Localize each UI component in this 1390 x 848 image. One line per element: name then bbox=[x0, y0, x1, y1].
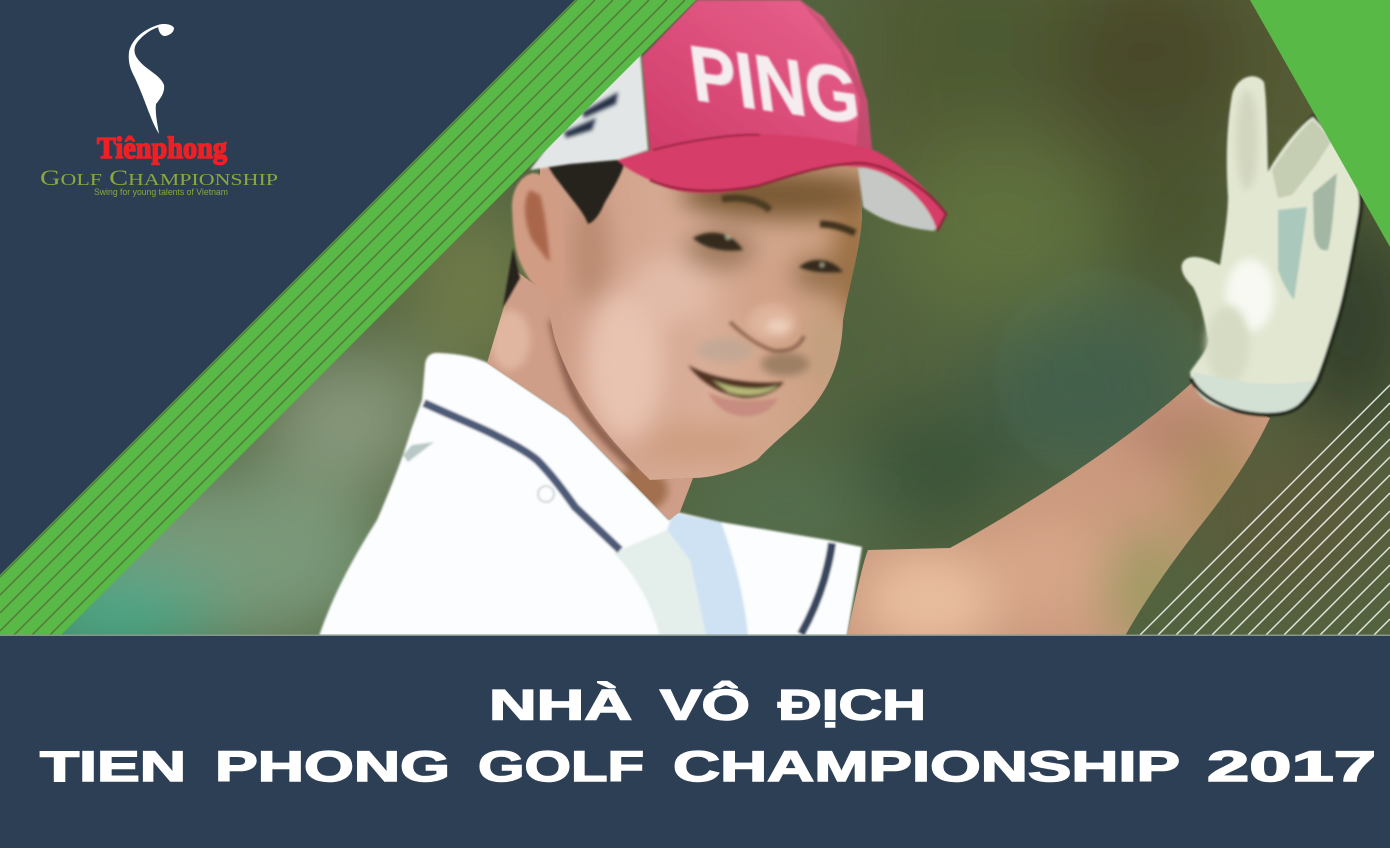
shirt emblem bbox=[538, 486, 554, 502]
head bbox=[503, 150, 880, 490]
glove highlight bbox=[1226, 259, 1274, 331]
logo tagline: Swing for young talents of Vietnam bbox=[94, 187, 228, 198]
collar trim bbox=[424, 403, 620, 550]
logo: Tien Phong Golf Championship bbox=[40, 24, 278, 198]
glove dark edge bbox=[1268, 114, 1363, 412]
top right green triangle bbox=[1250, 0, 1390, 247]
sleeve trim bbox=[801, 543, 832, 634]
logo subtitle: G OLF C HAMPIONSHIP bbox=[40, 165, 278, 190]
nose bbox=[730, 322, 804, 351]
cap underbrim bbox=[858, 165, 945, 231]
heading line 2: CHAMPIONSHIP bbox=[673, 743, 1180, 791]
heading line 2: PHONG bbox=[215, 743, 450, 791]
heading line 2: GOLF bbox=[478, 743, 644, 791]
golf glove bbox=[1182, 76, 1363, 415]
face bbox=[540, 164, 862, 480]
ear bbox=[510, 172, 552, 294]
heading line 1: VÔ bbox=[660, 680, 750, 730]
bottom title panel bbox=[0, 634, 1390, 848]
heading line 1 bbox=[489, 680, 926, 730]
white polo shirt bbox=[319, 353, 862, 636]
shoulder shade bbox=[403, 442, 434, 462]
pink cap bbox=[530, 0, 946, 231]
eyes bbox=[693, 233, 743, 251]
bokeh highlight bbox=[995, 270, 1205, 480]
eyebrows bbox=[722, 198, 770, 210]
cap sponsor text bbox=[564, 92, 618, 138]
sleeve blue shade bbox=[667, 513, 748, 636]
cap mesh panel bbox=[530, 50, 648, 170]
heading line 1: ĐỊCH bbox=[778, 682, 926, 730]
heading line 2 bbox=[40, 743, 1376, 791]
photo background foliage bbox=[0, 0, 1390, 670]
logo wordmark: Tiênphong bbox=[97, 130, 227, 165]
hair bbox=[545, 158, 626, 224]
neck bbox=[487, 272, 693, 520]
lower lip bbox=[708, 392, 778, 416]
placket bbox=[614, 530, 706, 636]
mouth bbox=[688, 365, 784, 398]
heading line 2: TIEN bbox=[40, 743, 186, 791]
green diagonal stripe band bbox=[0, 0, 696, 636]
glove cutouts bbox=[1278, 207, 1307, 300]
glove finger shading bbox=[1272, 120, 1332, 198]
heading line 1: NHÀ bbox=[489, 682, 632, 730]
photo: golfer waving bbox=[0, 0, 1390, 670]
white diagonal lines corner bbox=[1140, 385, 1390, 635]
cap logo text: PING bbox=[685, 29, 865, 142]
left navy panel bbox=[0, 0, 575, 575]
heading line 2: 2017 bbox=[1207, 743, 1376, 791]
golfer arm bbox=[847, 382, 1270, 634]
glove cuff bbox=[1193, 372, 1316, 414]
cap brim bbox=[617, 134, 946, 231]
cap crown bbox=[642, 0, 873, 160]
icon: golf club swoosh bbox=[129, 24, 174, 134]
hair behind ear bbox=[503, 248, 520, 307]
